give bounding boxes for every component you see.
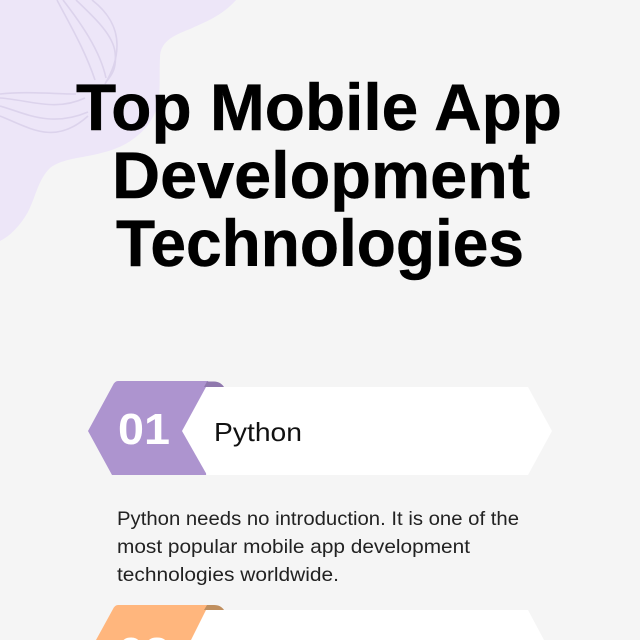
description: Python: technologies worldwide.	[117, 564, 339, 586]
fold tab	[204, 382, 224, 387]
title: Top Mobile App	[76, 70, 562, 144]
title	[76, 70, 562, 280]
description: Python: Python needs no introduction. It is one of the	[117, 508, 519, 530]
decorative lilac blob	[0, 0, 236, 241]
title: Technologies	[116, 206, 524, 280]
number badge	[96, 605, 212, 640]
white label ribbon	[182, 387, 552, 475]
number: 01	[118, 405, 170, 454]
step 02 (cropped)	[96, 605, 544, 640]
step name: Python	[214, 417, 302, 447]
step 01: Python	[88, 381, 552, 475]
title: Development	[112, 138, 530, 212]
fold tab	[204, 605, 224, 610]
white label ribbon	[191, 610, 544, 640]
number badge	[88, 381, 212, 475]
description: Python	[117, 508, 519, 586]
description: Python: most popular mobile app development	[117, 536, 471, 558]
